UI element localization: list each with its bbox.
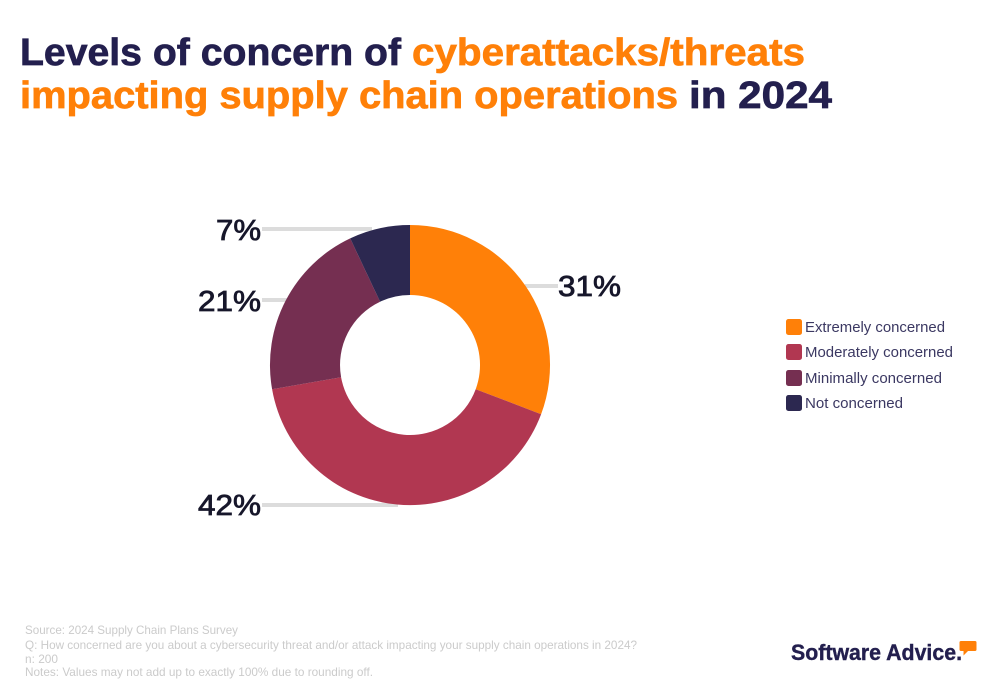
title: Levels of concern of (20, 32, 401, 74)
legend item: extremely concerned: Extremely concerned (805, 319, 945, 336)
value label: 7%: 7% (216, 215, 261, 247)
title: cyberattacks/threats (412, 32, 805, 74)
legend (786, 319, 953, 412)
source notes: n: 200 (25, 652, 58, 666)
value label: 42%: 42% (198, 490, 261, 522)
segment: moderately concerned (272, 377, 541, 505)
legend item: not concerned: Not concerned (805, 395, 903, 412)
source notes: Q: How concerned are you about a cybersecurity threat and/or attack impacting your supply chain operations in 2024? (25, 638, 637, 652)
segment: minimally concerned (270, 238, 380, 389)
segment: not concerned (350, 225, 410, 302)
title: impacting supply chain operations (20, 75, 678, 117)
source notes (25, 623, 637, 679)
source notes: Source: 2024 Supply Chain Plans Survey (25, 623, 238, 637)
value label: 31%: 31% (558, 271, 621, 303)
logo: Software Advice: Software Advice. (791, 640, 962, 665)
legend item: minimally concerned: Minimally concerned (805, 370, 942, 387)
donut chart (262, 225, 558, 507)
leader line: 7% (262, 227, 372, 231)
leader line: 21% (262, 298, 292, 302)
title (20, 32, 832, 117)
leader line: 31% (525, 284, 558, 288)
segment: extremely concerned (410, 225, 550, 414)
icon: speech bubble (960, 641, 976, 656)
legend item: moderately concerned: Moderately concerned (805, 344, 953, 361)
title: in 2024 (689, 75, 832, 117)
value label: 21%: 21% (198, 286, 261, 318)
leader line: 42% (262, 503, 398, 507)
source notes: Notes: Values may not add up to exactly 100% due to rounding off. (25, 665, 373, 679)
